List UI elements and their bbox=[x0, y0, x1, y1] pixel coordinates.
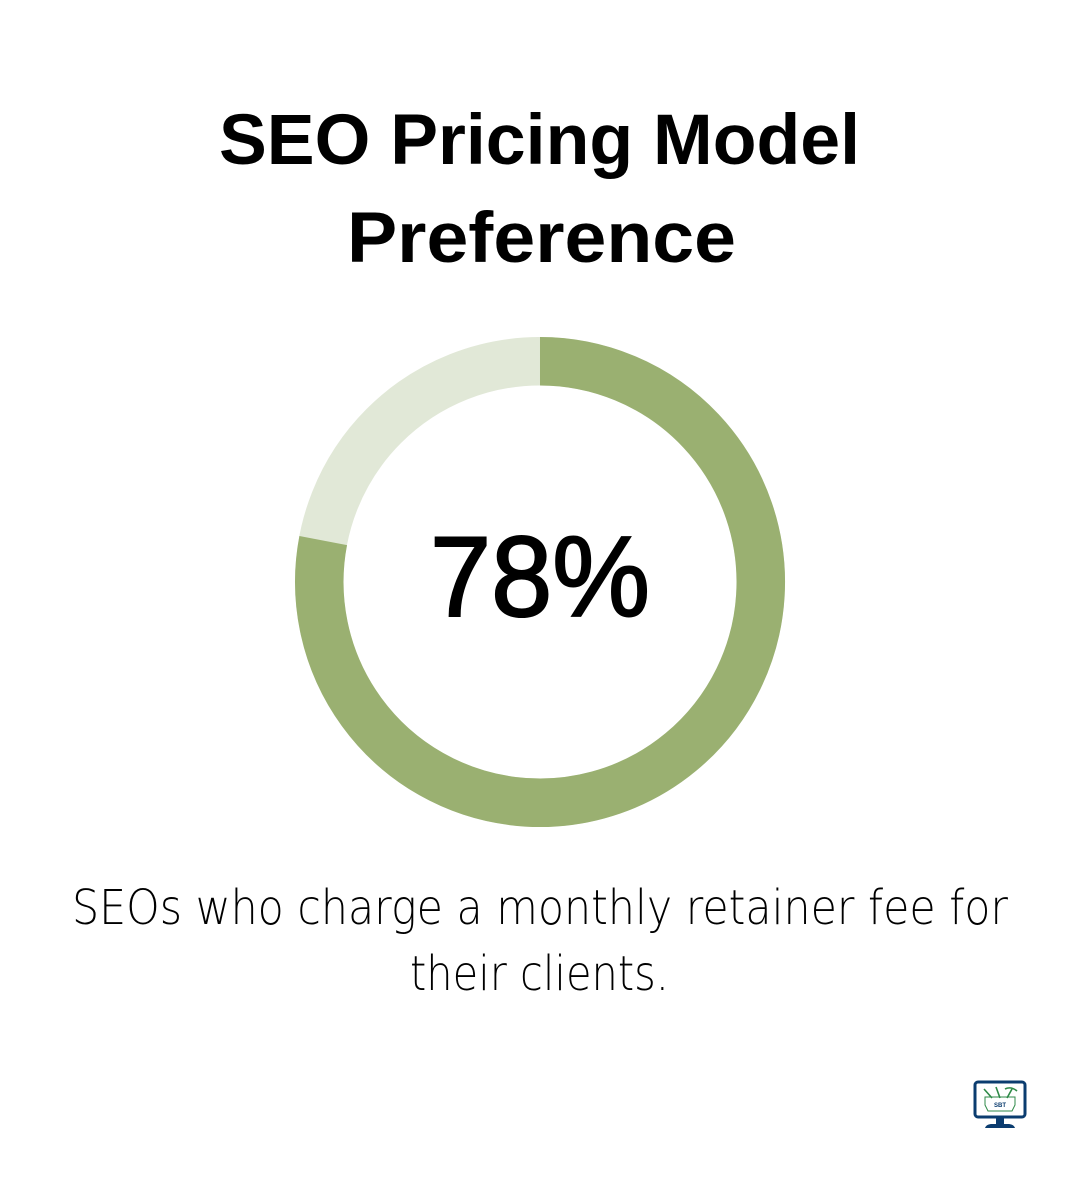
donut chart: 78% bbox=[319, 361, 761, 803]
title bbox=[219, 101, 860, 278]
title: Preference bbox=[347, 199, 736, 278]
percentage value: 78% bbox=[430, 514, 650, 641]
icon: SBT monitor logo: SBT bbox=[994, 1103, 1006, 1109]
description text: their clients. bbox=[410, 946, 669, 1002]
icon: SBT monitor logo bbox=[975, 1082, 1025, 1128]
description text bbox=[72, 880, 1008, 1002]
title: SEO Pricing Model bbox=[219, 101, 860, 180]
